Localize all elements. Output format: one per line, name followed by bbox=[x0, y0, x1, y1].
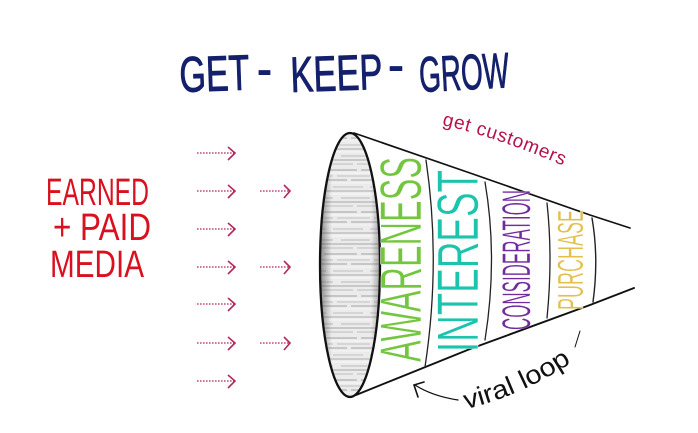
title: GROW bbox=[418, 42, 511, 103]
viral loop arrow bbox=[414, 331, 580, 400]
earned and paid media label: MEDIA bbox=[50, 244, 145, 286]
earned and paid media label bbox=[46, 172, 151, 286]
traffic arrows bbox=[197, 147, 290, 388]
title: KEEP bbox=[289, 44, 383, 103]
funnel outline bbox=[354, 133, 634, 395]
earned and paid media label: + PAID bbox=[53, 207, 151, 249]
viral loop label: viral loop bbox=[462, 354, 568, 408]
funnel bbox=[320, 133, 634, 397]
title: - bbox=[388, 37, 404, 93]
funnel: CONSIDERATION bbox=[495, 190, 539, 330]
stage: awareness: AWARENESS bbox=[369, 157, 434, 362]
title bbox=[178, 37, 511, 103]
title: - bbox=[257, 41, 272, 97]
funnel: PURCHASE bbox=[550, 210, 591, 310]
stage: interest: INTEREST bbox=[426, 170, 491, 352]
funnel mouth ellipse bbox=[320, 133, 380, 397]
stage dividers bbox=[425, 160, 596, 367]
earned and paid media label: EARNED bbox=[46, 172, 149, 214]
title: GET bbox=[178, 45, 250, 103]
get customers label: get customers bbox=[442, 116, 566, 164]
